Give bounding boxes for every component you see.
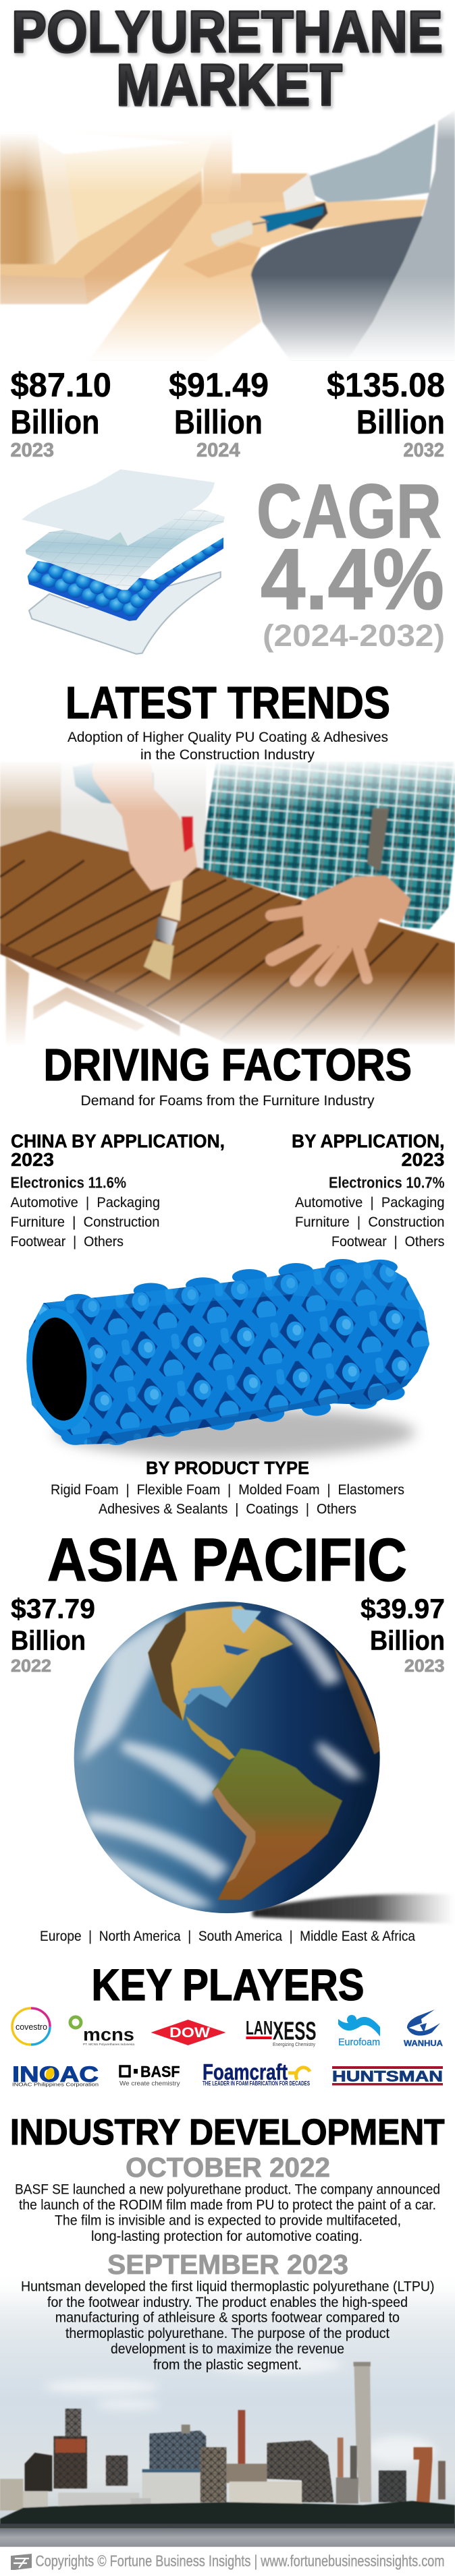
image: globe (74, 1602, 455, 1924)
stat: 2023 market size: 2023 (11, 440, 54, 461)
logo: Lanxess (246, 2018, 316, 2047)
October 2022 development: long-lasting protection for automotive coating. (91, 2229, 363, 2244)
stat: 2024 market size: Billion (174, 403, 263, 441)
panel: global by application: BY APPLICATION, (292, 1130, 444, 1152)
panel: global by application: Furniture | Construction (295, 1214, 444, 1230)
logo: BASF: BASF (140, 2063, 180, 2080)
title: MARKET (117, 55, 344, 120)
stat: 2024 market size: $91.49 (169, 366, 269, 404)
CAGR callout: 4.4% (261, 531, 444, 628)
panel: China by application: Electronics 11.6% (11, 1173, 126, 1191)
latest trends text: Adoption of Higher Quality PU Coating & Adhesives (68, 730, 388, 745)
stat: Asia Pacific 2022: Billion (11, 1625, 86, 1656)
September 2023 development (21, 2249, 435, 2372)
latest trends text: in the Construction Industry (140, 747, 315, 763)
stat: 2024 market size: 2024 (196, 440, 240, 461)
heading: key players: KEY PLAYERS (92, 1960, 365, 2010)
October 2022 development: The film is invisible and is expected to provide multifaceted, (55, 2213, 401, 2229)
September 2023 development: for the footwear industry. The product enables the high-speed (47, 2295, 408, 2310)
panel: China by application: 2023 (11, 1149, 54, 1170)
title: MARKET (116, 53, 342, 118)
regions list: Europe | North America | South America | Middle East & Africa (40, 1929, 415, 1944)
stat: Asia Pacific 2022 (11, 1593, 95, 1676)
logo: Lanxess: XESS (273, 2018, 316, 2046)
panel: by product type (51, 1458, 404, 1517)
panel: by product type: Rigid Foam | Flexible Foam | Molded Foam | Elastomers (51, 1482, 404, 1498)
stat: Asia Pacific 2023: 2023 (404, 1656, 444, 1676)
October 2022 development (15, 2152, 440, 2244)
logo: Covestro (12, 2008, 50, 2045)
panel: global by application (292, 1130, 444, 1250)
logo: Inoac: INOAC Philippines Corporation (12, 2081, 99, 2088)
logo: Wanhua: WANHUA (404, 2039, 443, 2048)
logo: Lanxess: Energizing Chemistry (273, 2043, 315, 2047)
panel: China by application: Automotive | Packaging (11, 1195, 160, 1210)
panel: global by application: Automotive | Packaging (295, 1195, 444, 1210)
panel: by product type: BY PRODUCT TYPE (146, 1458, 309, 1478)
logo: Foamcraft: Foamcraft (203, 2059, 288, 2084)
photo: brushing a wooden table (0, 759, 455, 1051)
heading: driving factors: DRIVING FACTORS (43, 1040, 412, 1090)
panel: China by application: Furniture | Construction (11, 1214, 159, 1230)
stat: 2023 market size: $87.10 (11, 366, 111, 404)
logo: BASF: We create chemistry (119, 2080, 180, 2088)
September 2023 development: from the plastic segment. (153, 2358, 302, 2372)
illustration: polyurethane foam layers (22, 469, 225, 654)
logo: Wanhua (404, 2010, 443, 2048)
September 2023 development: manufacturing of athleisure & sports footwear compared to (55, 2310, 400, 2326)
logos: key players (12, 2008, 443, 2088)
title (11, 0, 444, 120)
stat: Asia Pacific 2023: $39.97 (360, 1593, 445, 1624)
panel: factory skyline photo (0, 2271, 455, 2547)
logo: Eurofoam: Eurofoam (338, 2037, 380, 2048)
CAGR callout (257, 469, 445, 653)
logo: Lanxess: LAN (246, 2018, 273, 2039)
image: blue foam roller (20, 1259, 429, 1457)
latest trends text (68, 730, 388, 763)
stat: Asia Pacific 2023 (360, 1593, 445, 1676)
logo: Covestro: covestro (16, 2022, 47, 2032)
logo: Eurofoam (338, 2015, 380, 2048)
logo: Inoac: INOAC (12, 2062, 99, 2086)
panel: global by application: 2023 (401, 1149, 444, 1170)
logo: Dow (151, 2020, 225, 2045)
logo: MCNS: PT. MCNS Polyurethanes Indonesia (83, 2043, 135, 2046)
logo: Foamcraft: THE LEADER IN FOAM FABRICATION FOR DECADES (203, 2080, 310, 2088)
logo: MCNS: mcns (83, 2024, 134, 2045)
stat: Asia Pacific 2022: 2022 (11, 1656, 51, 1676)
stat: Asia Pacific 2023: Billion (370, 1625, 445, 1656)
stat: 2023 market size: Billion (11, 403, 100, 441)
driving factors text: Demand for Foams from the Furniture Industry (81, 1093, 375, 1109)
stat: 2032 market size: $135.08 (327, 366, 445, 404)
September 2023 development: SEPTEMBER 2023 (107, 2249, 348, 2280)
panel: China by application: Footwear | Others (11, 1234, 124, 1250)
panel: China by application: CHINA BY APPLICATION, (11, 1130, 225, 1152)
stat: 2032 market size (327, 366, 445, 461)
hero photo: roller on wooden stairs (0, 107, 455, 369)
September 2023 development: development is to maximize the revenue (111, 2341, 344, 2357)
panel: by product type: Adhesives & Sealants | Coatings | Others (99, 1501, 356, 1517)
stat: Asia Pacific 2022: $37.79 (11, 1593, 95, 1624)
September 2023 development: thermoplastic polyurethane. The purpose of the product (65, 2326, 390, 2341)
panel: global by application: Footwear | Others (331, 1234, 444, 1250)
logo: Dow: DOW (169, 2025, 210, 2041)
logo: Huntsman (332, 2066, 443, 2085)
October 2022 development: OCTOBER 2022 (126, 2152, 330, 2183)
stat: 2023 market size (11, 366, 111, 461)
heading: latest trends: LATEST TRENDS (65, 678, 390, 728)
stat: 2024 market size (169, 366, 269, 461)
logo: MCNS (70, 2017, 135, 2046)
September 2023 development: Huntsman developed the first liquid thermoplastic polyurethane (LTPU) (21, 2279, 435, 2294)
stat: 2032 market size: 2032 (404, 440, 444, 461)
logo: BASF (119, 2063, 180, 2088)
CAGR callout: (2024-2032) (263, 618, 445, 653)
icon: Fortune Business Insights logo (11, 2554, 32, 2570)
heading: Asia Pacific: ASIA PACIFIC (47, 1527, 407, 1594)
logo: Huntsman: HUNTSMAN (332, 2068, 443, 2085)
panel: China by application (11, 1130, 225, 1250)
